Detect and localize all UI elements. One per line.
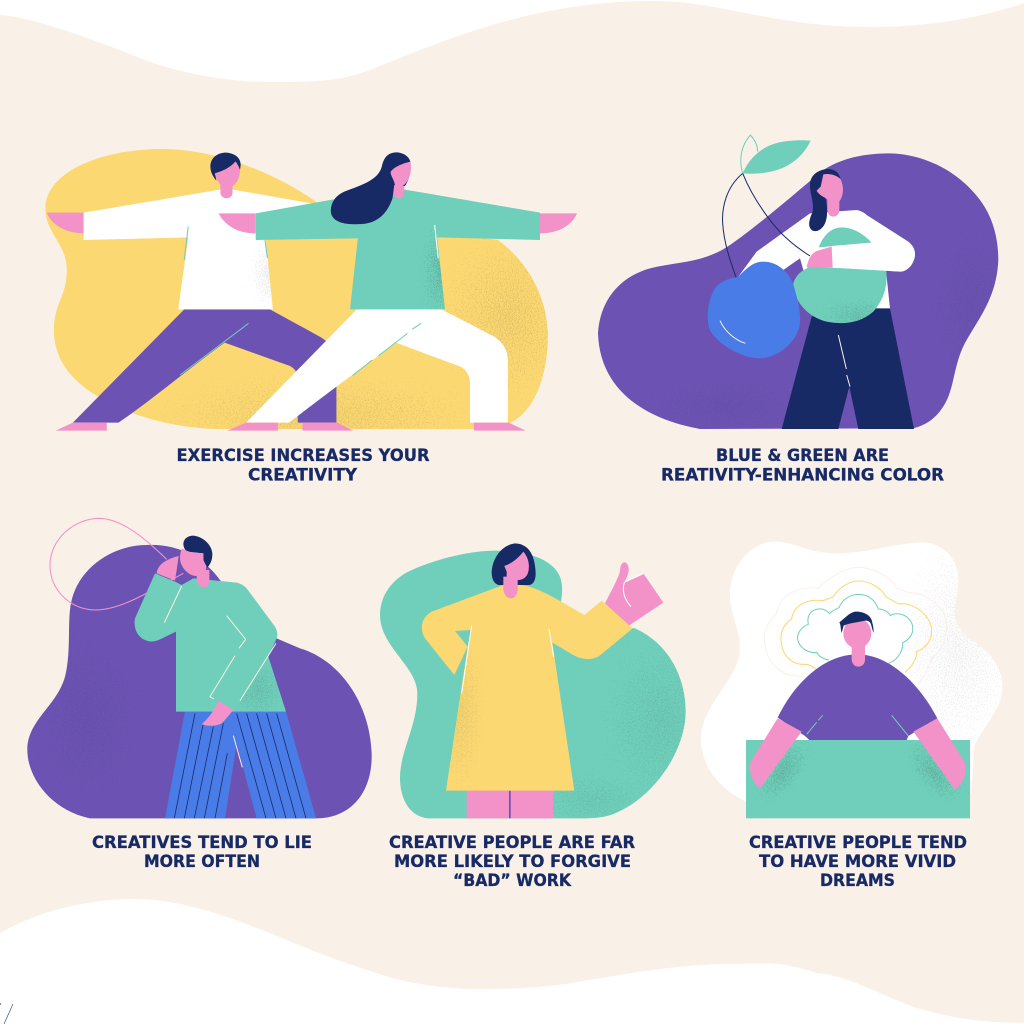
leg divider [509, 791, 511, 818]
stems [723, 173, 810, 277]
caption: exercise [176, 446, 430, 484]
woman: neck [503, 577, 518, 598]
man: sweater [778, 654, 937, 740]
man: hair [183, 536, 212, 568]
caption: lying: MORE OFTEN [144, 852, 260, 871]
teal dream cloud [798, 594, 913, 663]
teal fruit shade [806, 288, 880, 323]
woman: sweater [256, 189, 540, 309]
table [746, 740, 970, 818]
woman: hand [807, 247, 833, 267]
caption: forgiving: “BAD” WORK [453, 871, 572, 890]
woman: dress [422, 585, 633, 791]
leaf [743, 140, 811, 174]
man: face [215, 162, 240, 187]
man: neck [220, 183, 232, 198]
blob grain [640, 239, 996, 429]
teal fruit front [793, 267, 887, 323]
cream dream cloud [764, 567, 947, 683]
man: trouser highlight [180, 323, 249, 375]
caption: forgiving: CREATIVE PEOPLE ARE FAR [389, 833, 635, 852]
man: feet [56, 423, 353, 431]
caption: lying [92, 833, 312, 871]
man: trousers [165, 712, 316, 818]
blob grain [10, 603, 163, 830]
woman: sleeve highlight [435, 225, 438, 258]
panel: exercise illustration [45, 149, 591, 467]
woman: face [504, 552, 529, 580]
pink loop [50, 518, 183, 610]
table shadows [752, 740, 969, 817]
caption: dreams [749, 833, 967, 890]
leaf outline [741, 135, 758, 173]
woman: shirt [738, 210, 915, 308]
trouser stripes [174, 713, 306, 818]
man: raised hand [157, 556, 179, 581]
woman: sweater shade [413, 229, 444, 310]
yellow blob [45, 149, 548, 429]
man: lower hand [202, 701, 233, 726]
woman: hands [219, 213, 577, 233]
blob grain [123, 238, 548, 429]
woman: hair [492, 543, 536, 585]
caption: exercise: EXERCISE INCREASES YOUR [176, 446, 430, 465]
man: neck [852, 645, 865, 667]
blob grain [876, 544, 1002, 755]
man: hair [210, 153, 241, 181]
purple blob [598, 153, 998, 429]
panel: lying illustration [10, 518, 372, 830]
trouser highlight [233, 736, 242, 767]
caption: exercise: CREATIVITY [248, 466, 358, 484]
sweater shade [236, 664, 284, 712]
caption: dreams: TO HAVE MORE VIVID [759, 852, 956, 871]
purple blob [27, 545, 372, 818]
man: left arm [750, 718, 802, 788]
caption: dreams: CREATIVE PEOPLE TEND [749, 833, 967, 852]
dress highlights [462, 626, 554, 693]
woman: legs [467, 790, 553, 818]
woman: neck [394, 183, 404, 198]
caption: dreams: DREAMS [820, 871, 895, 890]
woman: feet [227, 423, 526, 431]
man: shirt edges [184, 227, 267, 260]
caption: blue and green [661, 446, 944, 484]
caption: lying: CREATIVES TEND TO LIE [92, 833, 312, 852]
panel: forgiving illustration [380, 543, 735, 833]
caption: blue and green: REATIVITY-ENHANCING COLOR [661, 466, 944, 484]
woman: trousers [246, 309, 508, 423]
man: shirt [84, 189, 359, 309]
man: neck [197, 570, 209, 587]
apple highlight [720, 321, 745, 343]
woman: sleeve [832, 242, 915, 272]
sweater highlights [807, 715, 908, 736]
dress shade [447, 631, 487, 790]
man: sweater [135, 573, 286, 712]
panel: blue and green illustration [598, 134, 998, 429]
caption: forgiving: MORE LIKELY TO FORGIVE [394, 852, 631, 871]
woman: neck [827, 195, 839, 217]
blue apple [708, 262, 800, 358]
yellow dream cloud [781, 581, 932, 672]
woman: trouser highlights [352, 323, 421, 376]
thumb highlight [623, 574, 643, 607]
corner marks [0, 1003, 13, 1024]
man: hair [839, 612, 874, 633]
man: trousers [73, 309, 336, 423]
woman: hand with thumb [605, 562, 663, 626]
woman: hair [331, 152, 411, 224]
teal fruit back [819, 227, 872, 247]
trouser highlights [838, 335, 850, 387]
white blob [701, 542, 1002, 808]
woman: face [391, 162, 411, 187]
woman: face [817, 174, 843, 202]
panel: dreams illustration [701, 542, 1002, 818]
teal blob [380, 551, 686, 818]
man: face [843, 618, 871, 648]
woman: hair [809, 169, 841, 231]
man: hands [47, 213, 84, 233]
caption: forgiving [389, 833, 635, 890]
man: shirt shade [244, 241, 272, 308]
man: face [180, 548, 207, 576]
man: right arm [913, 718, 965, 790]
woman: trousers [782, 300, 914, 429]
blob grain [553, 634, 686, 818]
sweater highlights [164, 586, 276, 701]
caption: blue and green: BLUE & GREEN ARE [716, 446, 889, 465]
